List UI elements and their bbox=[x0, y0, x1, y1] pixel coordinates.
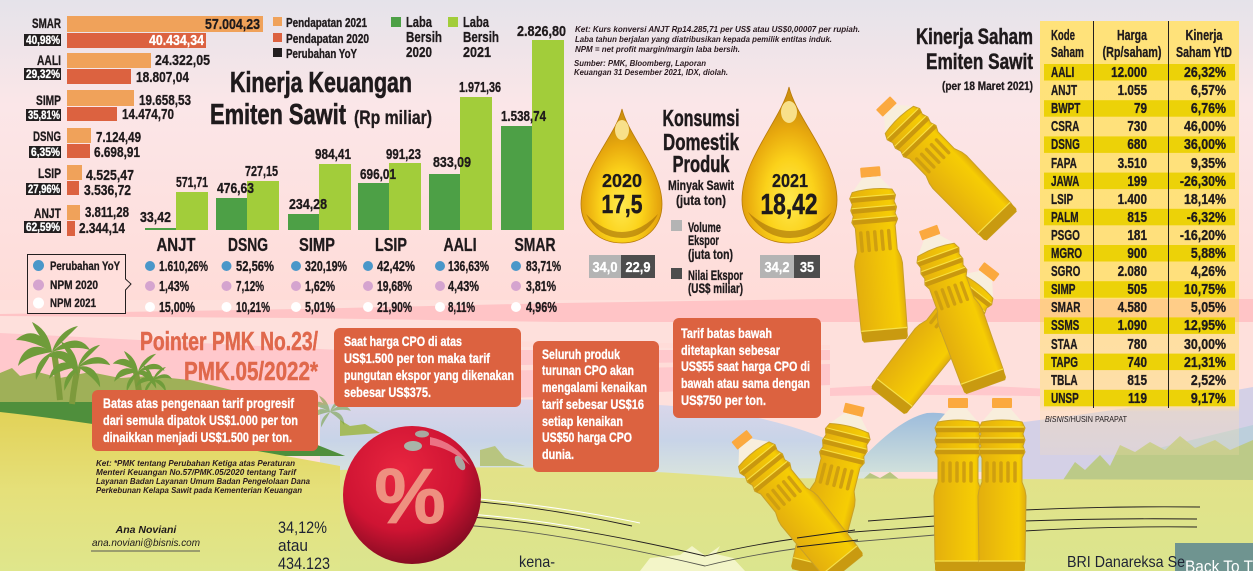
table: kinerja saham: 780 bbox=[1127, 336, 1147, 352]
oil drop 2020: 17,5 bbox=[602, 189, 642, 219]
heading: konsumsi domestik: Minyak Sawit bbox=[668, 177, 734, 193]
callout: tarif batas bawah: US$55 saat harga CPO di bbox=[681, 358, 810, 374]
chart: pendapatan horizontal bars: AALI bbox=[37, 52, 61, 68]
export boxes 2020: 34,0 bbox=[592, 259, 618, 276]
export boxes 2021: 35 bbox=[800, 259, 814, 276]
table: kinerja saham: 5,88% bbox=[1191, 245, 1226, 261]
NPM and YoY percentages: 1.610,26% bbox=[159, 259, 208, 275]
note: ket PMK: Layanan Badan Layanan Umum Badan Pengelolaan Dana bbox=[96, 476, 310, 486]
chart: laba bersih column bars: 833,09 bbox=[433, 155, 471, 171]
table: kinerja saham: TAPG bbox=[1051, 354, 1078, 370]
table: kinerja saham: 79 bbox=[1134, 100, 1147, 116]
chart: laba bersih column bars: 571,71 bbox=[176, 175, 208, 191]
company names row bbox=[156, 235, 556, 255]
byline: author: ana.noviani@bisnis.com bbox=[92, 537, 200, 549]
company names row: AALI bbox=[444, 235, 476, 255]
table: kinerja saham: PALM bbox=[1051, 209, 1079, 225]
legend: ekspor: Ekspor bbox=[688, 233, 719, 248]
title: kinerja saham: (per 18 Maret 2021) bbox=[942, 79, 1033, 93]
notes: ket and sumber: Ket: Kurs konversi ANJT Rp14.285,71 per US$ atau US$0,00007 per rupiah. bbox=[575, 24, 860, 34]
overflow text: article fragment: kena- bbox=[519, 554, 555, 571]
NPM and YoY percentages: 4,96% bbox=[526, 300, 557, 316]
title: Kinerja Keuangan Emiten Sawit: Kinerja Keuangan bbox=[230, 67, 412, 99]
notes: ket and sumber: Sumber: PMK, Bloomberg, Laporan bbox=[574, 58, 706, 68]
note: ket PMK: Menteri Keuangan No.57/PMK.05/2020 tentang Tarif bbox=[96, 467, 297, 477]
table: kinerja saham: Harga bbox=[1117, 28, 1148, 44]
callout: produk turunan bbox=[533, 341, 659, 472]
NPM and YoY percentages: 1,43% bbox=[159, 279, 189, 295]
table: kinerja saham: JAWA bbox=[1051, 173, 1079, 189]
table: kinerja saham: TBLA bbox=[1051, 372, 1078, 388]
table: kinerja saham: 1.090 bbox=[1118, 317, 1147, 333]
chart: laba bersih column bars: 991,23 bbox=[386, 147, 421, 163]
overflow text: article fragment: atau bbox=[278, 536, 308, 555]
heading: pointer PMK bbox=[140, 326, 319, 386]
icon: red bowling ball with percent: % bbox=[374, 452, 446, 540]
callout: tarif batas bawah: US$750 per ton. bbox=[681, 392, 766, 408]
table: kinerja saham: Saham YtD bbox=[1176, 45, 1232, 61]
table: kinerja saham: 18,14% bbox=[1184, 191, 1226, 207]
chart: pendapatan horizontal bars: 3.536,72 bbox=[84, 183, 131, 199]
chart: pendapatan horizontal bars: 40,98% bbox=[26, 35, 60, 47]
table: kinerja saham: CSRA bbox=[1051, 118, 1079, 134]
chart: pendapatan horizontal bars: LSIP bbox=[38, 165, 61, 181]
callout: harga CPO: sebesar US$375. bbox=[344, 384, 431, 400]
table: kinerja saham: 815 bbox=[1127, 372, 1147, 388]
table: kinerja saham: 9,35% bbox=[1191, 155, 1226, 171]
chart: pendapatan horizontal bars: 6.698,91 bbox=[94, 145, 140, 161]
table: kinerja saham: 5,05% bbox=[1191, 299, 1226, 315]
overflow text: article fragment: 34,12% bbox=[278, 518, 327, 537]
button: back to top bbox=[1175, 543, 1253, 571]
callout: batas atas: dari semula dipatok US$1.000 per ton bbox=[103, 412, 298, 428]
callout: tarif batas bawah: Tarif batas bawah bbox=[681, 325, 772, 341]
table: kinerja saham: 36,00% bbox=[1184, 136, 1226, 152]
callout: produk turunan: turunan CPO akan bbox=[542, 362, 634, 378]
table: kinerja saham: 30,00% bbox=[1184, 336, 1226, 352]
title: Kinerja Keuangan Emiten Sawit: Emiten Sawit bbox=[210, 99, 346, 131]
table: kinerja saham: 900 bbox=[1127, 245, 1147, 261]
callout: produk turunan: dunia. bbox=[542, 446, 574, 462]
note: ket PMK bbox=[96, 458, 310, 495]
company names row: ANJT bbox=[156, 235, 196, 255]
chart: pendapatan horizontal bars bbox=[24, 15, 263, 237]
table: kinerja saham: STAA bbox=[1051, 336, 1077, 352]
table: kinerja saham: 10,75% bbox=[1184, 281, 1226, 297]
table: kinerja saham: UNSP bbox=[1051, 390, 1079, 406]
legend box: perubahan YoY and NPM: Perubahan YoY bbox=[50, 259, 120, 273]
chart: pendapatan horizontal bars: SMAR bbox=[32, 15, 61, 31]
table: kinerja saham: ANJT bbox=[1051, 82, 1077, 98]
table: kinerja saham: (Rp/saham) bbox=[1102, 45, 1162, 61]
chart: pendapatan horizontal bars: 29,32% bbox=[26, 69, 60, 81]
chart: laba bersih column bars: 33,42 bbox=[140, 210, 171, 226]
legend: ekspor bbox=[671, 220, 744, 296]
oil drop 2021 bbox=[742, 87, 837, 243]
notes: ket and sumber: Laba tahun berjalan yang diatribusikan kepada pemilik entitas induk. bbox=[575, 34, 832, 44]
NPM and YoY percentages: 42,42% bbox=[377, 259, 415, 275]
table: kinerja saham: MGRO bbox=[1051, 245, 1082, 261]
NPM and YoY percentages: 10,21% bbox=[236, 300, 270, 316]
NPM and YoY percentages: 21,90% bbox=[377, 300, 412, 316]
export boxes 2021: 34,2 bbox=[764, 259, 790, 276]
table: kinerja saham: 26,32% bbox=[1184, 64, 1226, 80]
heading: konsumsi domestik bbox=[662, 105, 740, 208]
legend: laba bersih: Laba bbox=[406, 14, 432, 31]
export boxes 2021 bbox=[760, 255, 820, 278]
callout: harga CPO: Saat harga CPO di atas bbox=[344, 333, 462, 349]
NPM and YoY percentages: 19,68% bbox=[377, 279, 412, 295]
table: kinerja saham: SIMP bbox=[1051, 281, 1075, 297]
table: kinerja saham: -6,32% bbox=[1187, 209, 1226, 225]
heading: konsumsi domestik: Produk bbox=[672, 151, 730, 177]
notes: ket and sumber: NPM = net profit margin/margin laba bersih. bbox=[575, 44, 740, 54]
chart: laba bersih column bars: 727,15 bbox=[245, 164, 278, 180]
table: kinerja saham: 815 bbox=[1127, 209, 1147, 225]
table: kinerja saham: LSIP bbox=[1051, 191, 1073, 207]
callout: batas atas: dinaikkan menjadi US$1.500 per ton. bbox=[103, 429, 292, 445]
legend: pendapatan: Perubahan YoY bbox=[286, 47, 358, 61]
callout: tarif batas bawah bbox=[673, 318, 821, 418]
table: kinerja saham: 1.400 bbox=[1118, 191, 1147, 207]
table: kinerja saham: DSNG bbox=[1051, 136, 1080, 152]
chart: pendapatan horizontal bars: 27,96% bbox=[28, 184, 60, 196]
callout: tarif batas bawah: ditetapkan sebesar bbox=[681, 342, 780, 358]
company names row: SMAR bbox=[514, 235, 556, 255]
table: kinerja saham: -26,30% bbox=[1180, 173, 1226, 189]
chart: pendapatan horizontal bars: 4.525,47 bbox=[86, 168, 134, 184]
title: Kinerja Keuangan Emiten Sawit: (Rp miliar) bbox=[354, 108, 432, 129]
NPM and YoY percentages: 1,62% bbox=[305, 279, 335, 295]
motion lines bbox=[455, 497, 1200, 566]
table: kinerja saham: 4.580 bbox=[1118, 299, 1147, 315]
byline: author: Ana Noviani bbox=[115, 524, 177, 536]
legend: laba bersih: Bersih bbox=[406, 29, 442, 46]
title: kinerja saham: Kinerja Saham bbox=[916, 24, 1033, 49]
chart: pendapatan horizontal bars: 35,81% bbox=[28, 110, 60, 122]
chart: pendapatan horizontal bars: 19.658,53 bbox=[139, 93, 191, 109]
NPM and YoY percentages: 8,11% bbox=[448, 300, 475, 316]
callout: harga CPO: US$1.500 per ton maka tarif bbox=[344, 350, 490, 366]
callout: produk turunan: mengalami kenaikan bbox=[542, 379, 647, 395]
table: kinerja saham: 6,76% bbox=[1191, 100, 1226, 116]
table: kinerja saham: 119 bbox=[1128, 390, 1147, 406]
legend: pendapatan bbox=[273, 16, 369, 61]
table: kinerja saham: 199 bbox=[1127, 173, 1147, 189]
table: kinerja saham: Saham bbox=[1051, 45, 1084, 61]
chart: pendapatan horizontal bars: 2.344,14 bbox=[79, 221, 125, 237]
export boxes 2020 bbox=[589, 255, 655, 278]
NPM and YoY percentages: 136,63% bbox=[448, 259, 489, 275]
legend: ekspor: (US$ miliar) bbox=[688, 281, 743, 296]
chart: laba bersih column bars: 476,63 bbox=[217, 181, 254, 197]
legend: pendapatan: Pendapatan 2020 bbox=[286, 32, 369, 46]
legend: laba bersih: Bersih bbox=[463, 29, 499, 46]
notes: ket and sumber: Keuangan 31 Desember 2021, IDX, diolah. bbox=[574, 67, 728, 77]
table: kinerja saham: 46,00% bbox=[1184, 118, 1226, 134]
overflow text: article fragment bbox=[278, 518, 555, 571]
callout: batas atas bbox=[92, 390, 318, 451]
table: kinerja saham: SMAR bbox=[1051, 299, 1080, 315]
legend: laba bersih: Laba bbox=[463, 14, 489, 31]
legend box: perubahan YoY and NPM: NPM 2020 bbox=[50, 278, 98, 292]
table: kinerja saham: 181 bbox=[1127, 227, 1147, 243]
legend: ekspor: Nilai Ekspor bbox=[688, 268, 744, 283]
table: kinerja saham: 3.510 bbox=[1118, 155, 1147, 171]
chart: pendapatan horizontal bars: 7.124,49 bbox=[96, 130, 141, 146]
table: kinerja saham: 2.080 bbox=[1118, 263, 1147, 279]
table: kinerja saham: 12,95% bbox=[1184, 317, 1226, 333]
table: kinerja saham: PSGO bbox=[1051, 227, 1080, 243]
NPM and YoY percentages: 4,43% bbox=[448, 279, 479, 295]
company names row: SIMP bbox=[299, 235, 335, 255]
NPM and YoY percentages: 7,12% bbox=[236, 279, 264, 295]
callout: produk turunan: Seluruh produk bbox=[542, 346, 620, 362]
callout: produk turunan: US$50 harga CPO bbox=[542, 429, 632, 445]
table: kinerja saham: 4,26% bbox=[1191, 263, 1226, 279]
table: kinerja saham: 1.055 bbox=[1118, 82, 1147, 98]
legend: ekspor: Volume bbox=[688, 220, 721, 235]
table: kinerja saham: 6,57% bbox=[1191, 82, 1226, 98]
chart: pendapatan horizontal bars: 62,59% bbox=[26, 222, 60, 234]
legend: laba bersih bbox=[391, 14, 499, 61]
byline: author bbox=[91, 524, 200, 551]
heading: pointer PMK: PMK.05/2022* bbox=[184, 356, 319, 386]
title: kinerja saham: Emiten Sawit bbox=[926, 49, 1034, 74]
NPM and YoY percentages: 5,01% bbox=[305, 300, 335, 316]
title: kinerja saham bbox=[916, 24, 1034, 93]
table: kinerja saham: SGRO bbox=[1051, 263, 1081, 279]
note: ket PMK: Ket: *PMK tentang Perubahan Ketiga atas Peraturan bbox=[96, 458, 295, 468]
company names row: DSNG bbox=[228, 235, 268, 255]
table: kinerja saham: 740 bbox=[1127, 354, 1147, 370]
heading: konsumsi domestik: Domestik bbox=[663, 129, 739, 155]
table: kinerja saham: 9,17% bbox=[1191, 390, 1226, 406]
table: kinerja saham: 505 bbox=[1127, 281, 1147, 297]
icon: oil bottles bbox=[721, 87, 1026, 571]
title: Kinerja Keuangan Emiten Sawit bbox=[210, 67, 432, 131]
oil drop 2020: 2020 bbox=[602, 171, 642, 191]
chart: pendapatan horizontal bars: 14.474,70 bbox=[122, 107, 174, 123]
NPM and YoY percentages: 320,19% bbox=[305, 259, 347, 275]
chart: pendapatan horizontal bars: 3.811,28 bbox=[85, 205, 129, 221]
table: kinerja saham: 680 bbox=[1127, 136, 1147, 152]
chart: pendapatan horizontal bars: 40.434,34 bbox=[149, 33, 204, 49]
table: kinerja saham: BISNIS/HUSIN PARAPAT bbox=[1045, 414, 1127, 424]
chart: pendapatan horizontal bars: ANJT bbox=[34, 205, 61, 221]
table: kinerja saham: BWPT bbox=[1051, 100, 1081, 116]
callout: harga CPO: pungutan ekspor yang dikenakan bbox=[344, 367, 514, 383]
company names row: LSIP bbox=[375, 235, 407, 255]
callout: harga CPO bbox=[334, 328, 521, 407]
legend: laba bersih: 2021 bbox=[463, 44, 491, 61]
chart: pendapatan horizontal bars: SIMP bbox=[36, 92, 61, 108]
NPM and YoY percentages: 3,81% bbox=[526, 279, 556, 295]
overflow text: BRI Danareksa: BRI Danareksa Se bbox=[1067, 554, 1185, 571]
chart: pendapatan horizontal bars: 6,35% bbox=[31, 147, 60, 159]
NPM and YoY percentages: 15,00% bbox=[159, 300, 195, 316]
oil drop 2021: 18,42 bbox=[760, 189, 818, 221]
NPM and YoY percentages bbox=[145, 259, 561, 316]
oil drop 2020 bbox=[581, 109, 662, 243]
legend: pendapatan: Pendapatan 2021 bbox=[286, 16, 367, 30]
chart: pendapatan horizontal bars: 57.004,23 bbox=[205, 17, 260, 33]
chart: laba bersih column bars: 1.538,74 bbox=[501, 109, 546, 125]
note: ket PMK: Perkebunan Kelapa Sawit pada Kementerian Keuangan bbox=[96, 485, 302, 495]
callout: tarif batas bawah: bawah atau sama dengan bbox=[681, 375, 810, 391]
chart: pendapatan horizontal bars: 18.807,04 bbox=[136, 70, 189, 86]
table: kinerja saham: SSMS bbox=[1051, 317, 1079, 333]
notes: ket and sumber bbox=[574, 24, 860, 77]
NPM and YoY percentages: 83,71% bbox=[526, 259, 561, 275]
heading: konsumsi domestik: Konsumsi bbox=[662, 105, 740, 131]
callout: batas atas: Batas atas pengenaan tarif progresif bbox=[103, 395, 294, 411]
table: kinerja saham: Kinerja bbox=[1186, 28, 1223, 44]
legend box: perubahan YoY and NPM bbox=[28, 254, 131, 314]
legend: laba bersih: 2020 bbox=[406, 44, 432, 61]
chart: pendapatan horizontal bars: DSNG bbox=[33, 128, 61, 144]
heading: pointer PMK: Pointer PMK No.23/ bbox=[140, 326, 318, 356]
chart: laba bersih column bars bbox=[140, 24, 566, 230]
table: kinerja saham: 2,52% bbox=[1191, 372, 1226, 388]
heading: konsumsi domestik: (juta ton) bbox=[676, 192, 726, 208]
legend: ekspor: (juta ton) bbox=[688, 247, 733, 262]
table: kinerja saham: 21,31% bbox=[1184, 354, 1226, 370]
table: kinerja saham: 12.000 bbox=[1111, 64, 1147, 80]
chart: laba bersih column bars: 984,41 bbox=[315, 147, 351, 163]
motion lines over front bottle bbox=[797, 530, 858, 547]
table: kinerja saham: Kode bbox=[1051, 28, 1075, 44]
chart: laba bersih column bars: 696,01 bbox=[360, 167, 396, 183]
table: kinerja saham: 730 bbox=[1127, 118, 1147, 134]
table: kinerja saham: -16,20% bbox=[1180, 227, 1226, 243]
table: kinerja saham: FAPA bbox=[1051, 155, 1077, 171]
callout: produk turunan: tarif sebesar US$16 bbox=[542, 396, 644, 412]
callout: produk turunan: setiap kenaikan bbox=[542, 413, 623, 429]
chart: laba bersih column bars: 2.826,80 bbox=[517, 24, 566, 40]
legend box: perubahan YoY and NPM: NPM 2021 bbox=[50, 296, 96, 310]
NPM and YoY percentages: 52,56% bbox=[236, 259, 274, 275]
chart: laba bersih column bars: 234,28 bbox=[289, 197, 327, 213]
chart: laba bersih column bars: 1.971,36 bbox=[459, 80, 501, 96]
chart: pendapatan horizontal bars: 24.322,05 bbox=[155, 53, 210, 69]
table: kinerja saham bbox=[1040, 21, 1239, 455]
table: kinerja saham: AALI bbox=[1051, 64, 1074, 80]
export boxes 2020: 22,9 bbox=[626, 259, 650, 276]
icon: palm trees bbox=[16, 322, 351, 427]
oil drop 2021: 2021 bbox=[772, 171, 808, 191]
icon: red bowling ball with percent bbox=[343, 426, 481, 564]
